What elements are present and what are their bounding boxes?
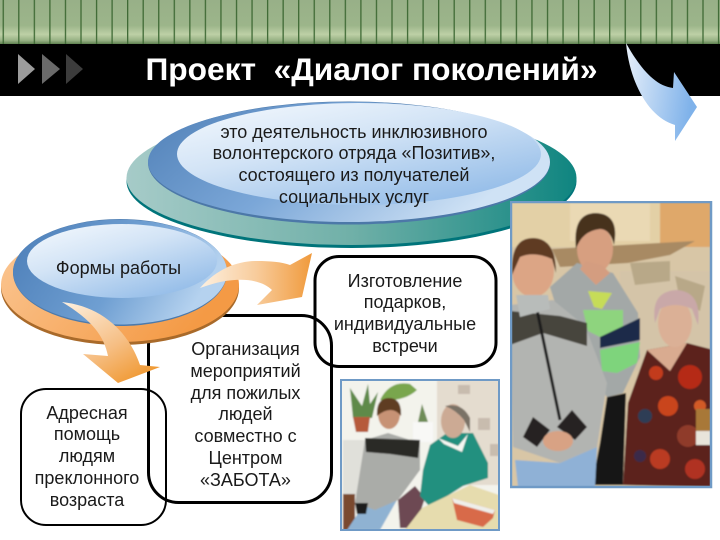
text: oval description — [213, 122, 495, 207]
title bar — [0, 44, 720, 96]
text: targeted help — [35, 402, 139, 510]
icon: triple chevrons — [18, 54, 83, 84]
text: targeted help: людям — [59, 446, 115, 466]
text: targeted help: помощь — [54, 424, 120, 444]
panel: top oval — [126, 102, 576, 248]
icon: orange arrow to targeted help — [62, 302, 160, 383]
figure: middle woman — [550, 213, 640, 485]
panel: forms of work oval — [1, 219, 312, 383]
table with packet — [405, 485, 499, 530]
figure: left woman — [510, 238, 607, 487]
text: gifts: подарков, — [364, 292, 446, 312]
text: gifts — [334, 270, 476, 356]
icon: blue curved arrow — [626, 43, 697, 141]
figure: elderly woman in teal — [420, 404, 488, 507]
text: events: совместно с — [194, 426, 297, 446]
photo frame — [511, 202, 711, 487]
text: oval description: состоящего из получателей — [238, 165, 470, 185]
text: events: Организация — [191, 339, 300, 359]
text: events — [190, 339, 301, 490]
figure: elderly woman — [623, 290, 714, 487]
text: gifts: Изготовление — [348, 270, 462, 290]
text: events: для пожилых — [191, 383, 300, 403]
text: events: Центром — [209, 448, 282, 468]
photo frame — [341, 380, 499, 530]
text: targeted help: Адресная — [46, 402, 128, 422]
photo: young woman and elderly woman at table — [340, 379, 500, 531]
text: events: «ЗАБОТА» — [200, 470, 291, 490]
icon: orange arrow to gifts — [200, 253, 312, 305]
text: targeted help: преклонного — [35, 468, 139, 488]
figure: young woman — [347, 398, 425, 530]
text: events: людей — [218, 404, 273, 424]
title: Проект «Диалог поколений» — [145, 51, 598, 87]
text: oval description: это деятельность инклюзивного — [220, 122, 488, 142]
text: oval description: волонтерского отряда «Позитив», — [213, 143, 495, 163]
text: gifts: встречи — [372, 336, 438, 356]
text: gifts: индивидуальные — [334, 314, 476, 334]
text: events: мероприятий — [190, 361, 301, 381]
text: forms of work: Формы работы — [56, 258, 181, 278]
text: targeted help: возраста — [50, 490, 124, 510]
header band: green striped strip — [0, 0, 720, 44]
text: oval description: социальных услуг — [279, 187, 429, 207]
photo: three women in kitchen — [510, 201, 712, 488]
